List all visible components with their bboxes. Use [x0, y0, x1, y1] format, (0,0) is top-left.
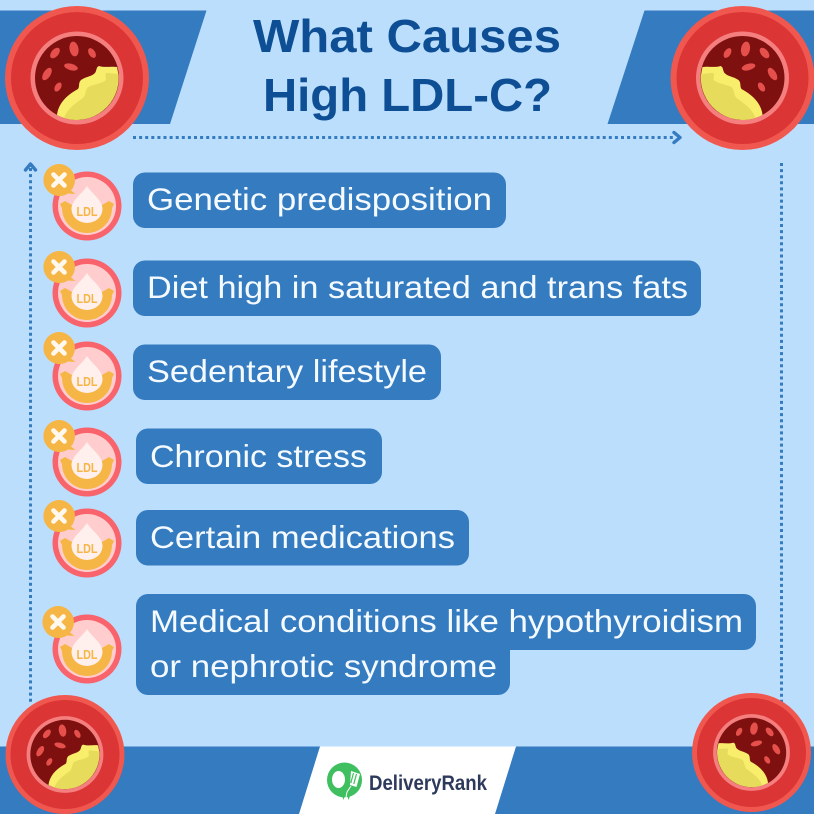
icon: artery top-left — [5, 6, 149, 150]
icon: LDL warning 4: LDL — [76, 461, 98, 475]
pill: diet — [133, 260, 701, 316]
icon: artery bottom-left — [6, 695, 124, 814]
title: High LDL-C? — [263, 69, 552, 121]
pill: medical conditions: or nephrotic syndrome — [150, 648, 497, 684]
title: What Causes — [253, 10, 561, 62]
pill: medications — [136, 510, 469, 566]
icon: LDL warning 1: LDL — [76, 205, 98, 219]
pill: stress — [136, 428, 382, 484]
icon: LDL warning 3: LDL — [76, 375, 98, 389]
icon: LDL warning 5: LDL — [76, 542, 98, 556]
icon: LDL warning 3 — [43, 332, 122, 410]
pill: genetic predisposition — [133, 172, 506, 228]
pill: sedentary — [133, 344, 441, 400]
bottom banner — [0, 746, 814, 814]
pill: medical conditions: Medical conditions like hypothyroidism — [150, 603, 743, 639]
pill: medications: Certain medications — [150, 519, 455, 555]
icon: LDL warning 6 — [42, 606, 122, 684]
item 1 — [43, 164, 506, 240]
title — [253, 10, 561, 121]
item 6 — [42, 594, 756, 695]
top-left banner — [0, 10, 206, 124]
right dotted line — [780, 163, 783, 702]
item 4 — [43, 420, 382, 496]
icon: LDL warning 2: LDL — [76, 292, 98, 306]
icon: LDL warning 1 — [43, 164, 122, 240]
pill: diet: Diet high in saturated and trans fats — [147, 269, 688, 305]
logo plate — [299, 746, 516, 814]
logo: DeliveryRank — [327, 762, 487, 800]
item 2 — [43, 251, 701, 328]
icon: artery bottom-right — [692, 693, 811, 812]
logo: DeliveryRank: DeliveryRank — [369, 772, 487, 795]
item 3 — [43, 332, 441, 410]
icon: LDL warning 5 — [43, 500, 122, 578]
icon: fork and spoon — [327, 762, 362, 800]
arrow: left dotted — [26, 164, 36, 702]
pill: sedentary: Sedentary lifestyle — [147, 353, 427, 389]
icon: artery top-right — [670, 6, 814, 150]
top-right banner — [608, 10, 814, 124]
item 5 — [43, 500, 469, 578]
icon: LDL warning 6: LDL — [76, 648, 98, 662]
icon: LDL warning 4 — [43, 420, 122, 496]
arrow: top dotted — [133, 132, 680, 142]
icon: LDL warning 2 — [43, 251, 122, 328]
pill: stress: Chronic stress — [150, 438, 367, 474]
pill: genetic predisposition: Genetic predisposition — [147, 181, 492, 217]
pill: medical conditions — [136, 594, 756, 695]
